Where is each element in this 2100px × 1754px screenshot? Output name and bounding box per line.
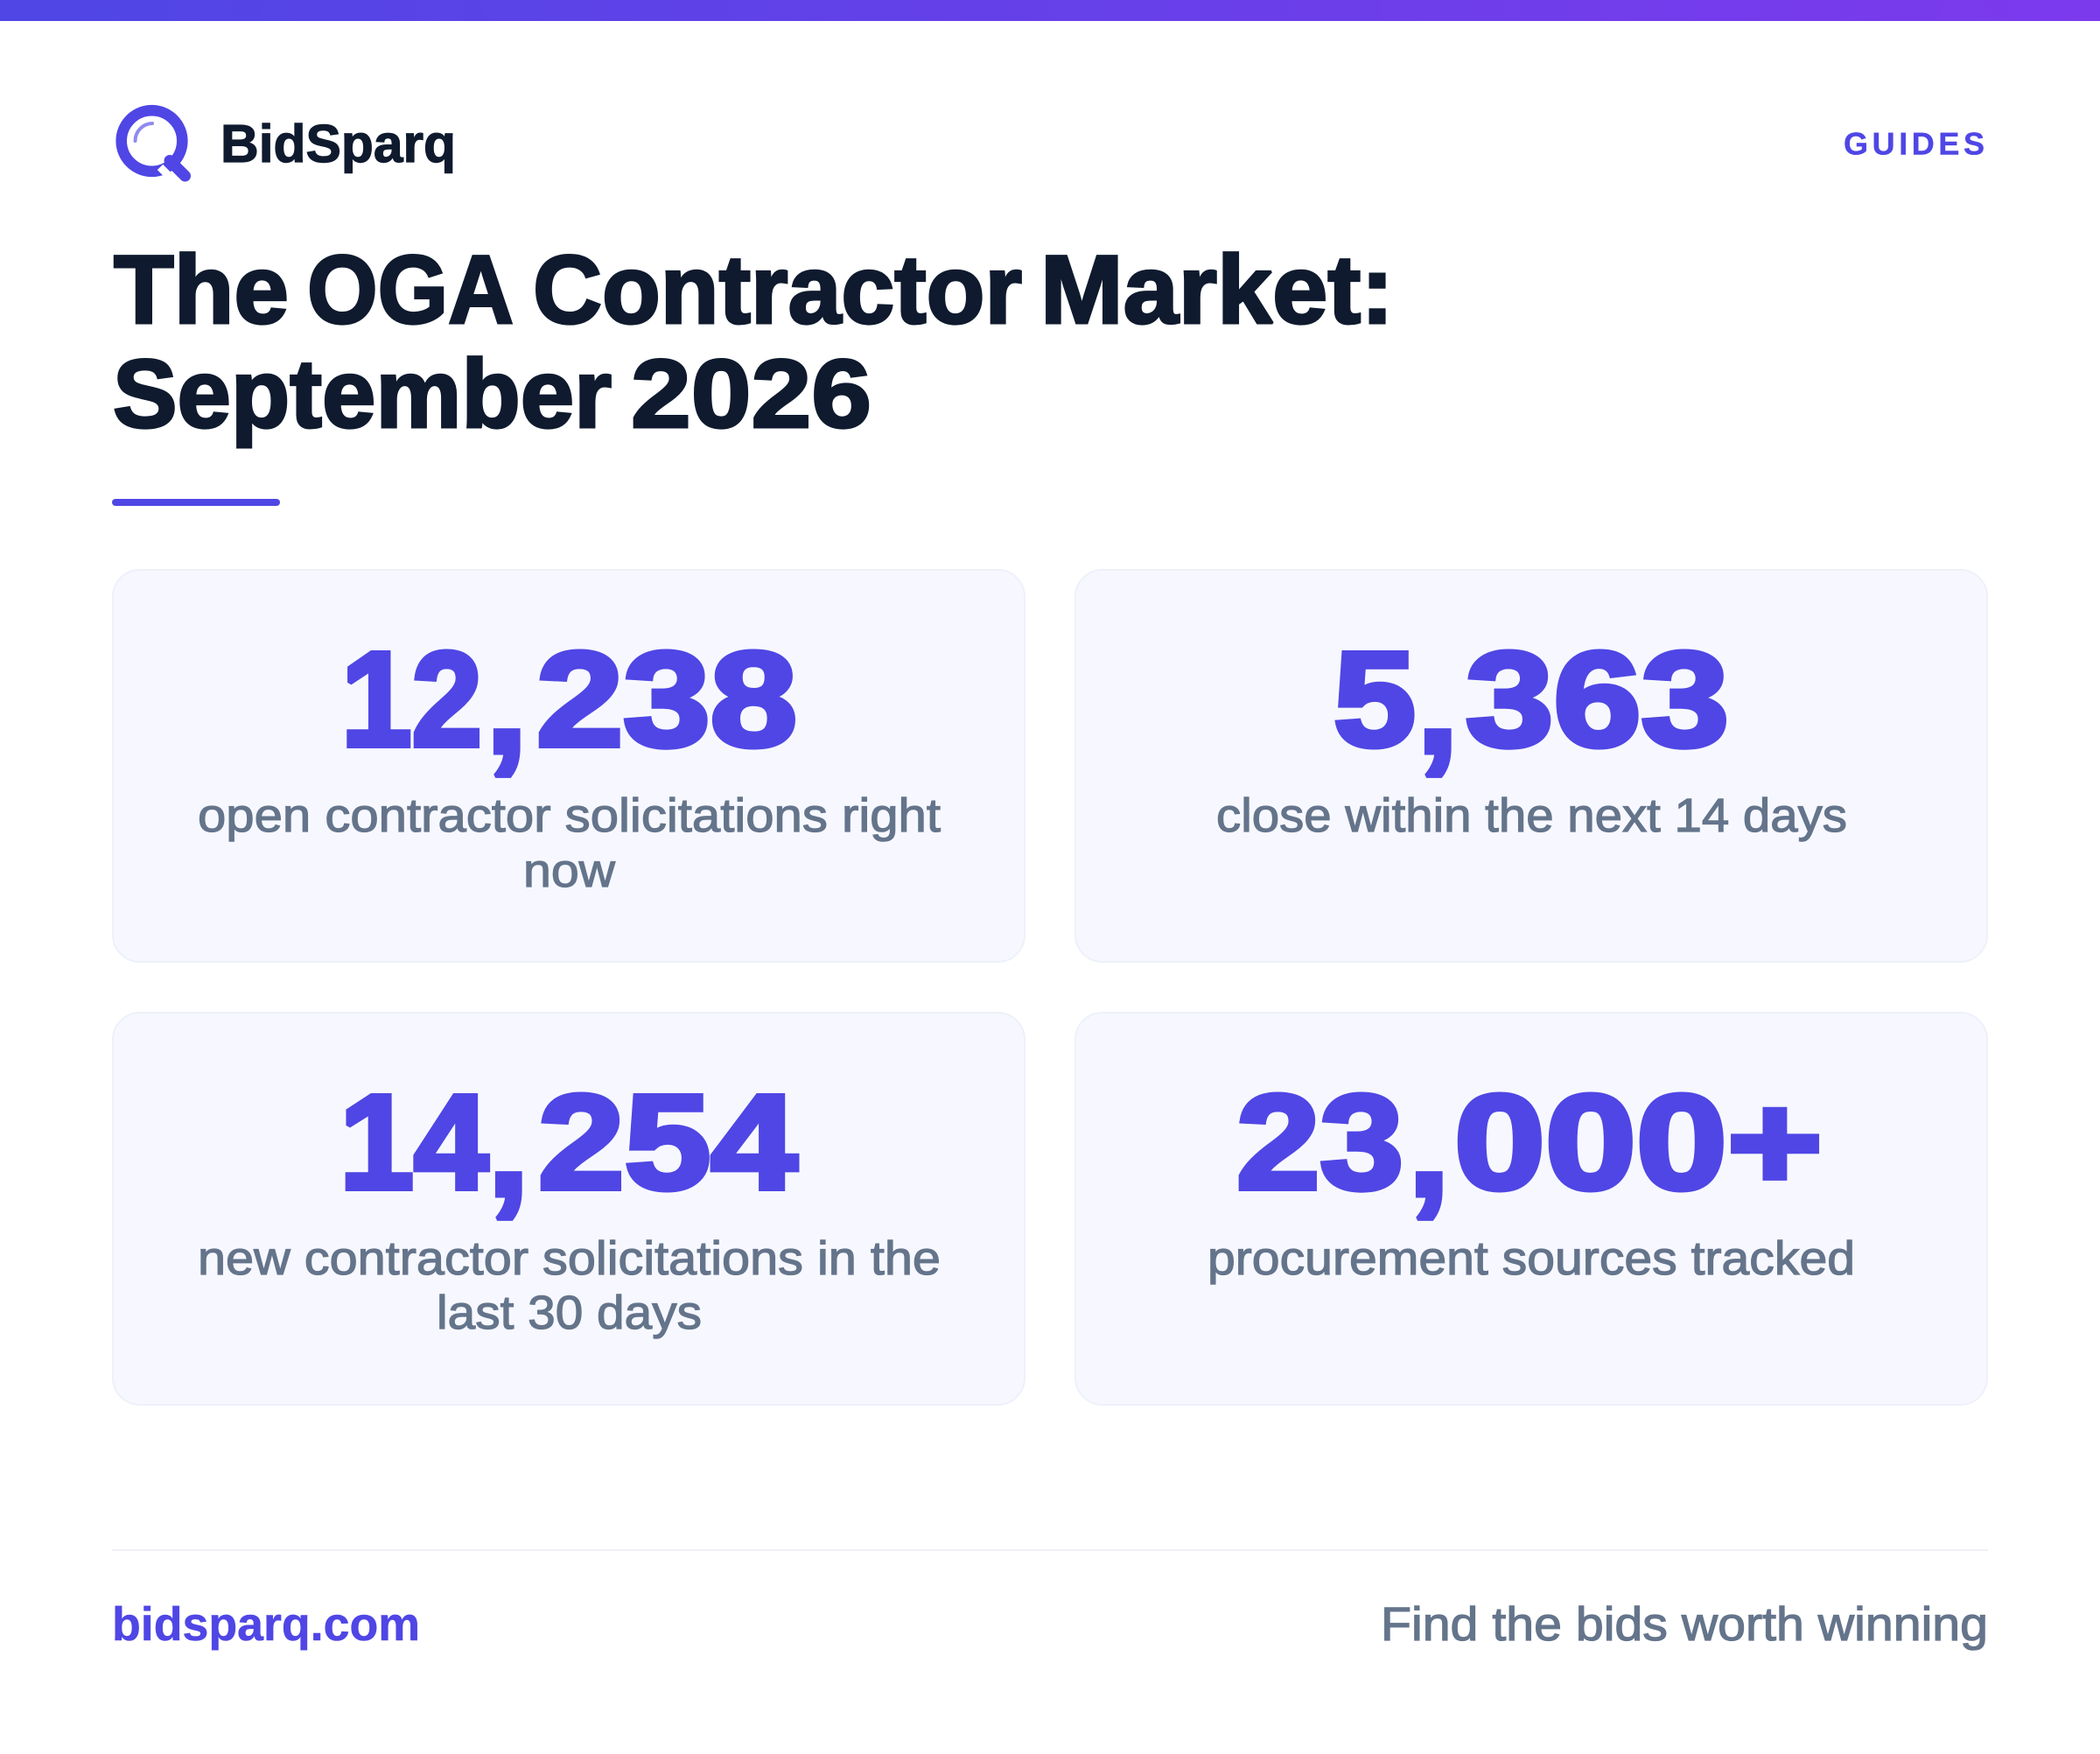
header: brand logo and wordmark [122, 110, 456, 177]
panel: open solicitations [113, 570, 1025, 962]
brand name: BidSparq [220, 114, 456, 173]
stat number: 000+ [1454, 1067, 1823, 1217]
stat description: procurement sources tracked [1208, 1232, 1855, 1285]
stat number: 238 [536, 624, 797, 775]
panel: new solicitations [113, 1013, 1025, 1405]
title: Market: [1040, 235, 1394, 344]
stat number: 363 [1466, 624, 1729, 775]
stat description [198, 1232, 941, 1339]
icon: magnifying glass Q logo [122, 110, 186, 177]
stat description: new contractor solicitations in the [198, 1232, 941, 1285]
title: OGA [307, 235, 514, 344]
stat number: , [485, 619, 528, 785]
title: The [114, 235, 289, 344]
stat description: now [523, 845, 616, 897]
stat number: 23 [1236, 1067, 1404, 1217]
footer: tagline: Find the bids worth winning [1381, 1598, 1988, 1651]
stat number [1334, 619, 1729, 785]
stat number: 14 [340, 1067, 488, 1217]
stat description: last 30 days [437, 1287, 702, 1339]
title: 2026 [631, 340, 872, 448]
category label: GUIDES [1844, 126, 1984, 161]
stat number: , [1416, 619, 1460, 785]
footer: website: bidsparq.com [112, 1598, 420, 1651]
stat number [341, 619, 797, 785]
stat description [198, 789, 941, 897]
accent underline [112, 499, 280, 506]
stat number: , [486, 1062, 530, 1228]
top gradient bar [0, 0, 2100, 21]
stat number: , [1407, 1062, 1451, 1228]
footer divider [112, 1549, 1988, 1551]
title: September [113, 340, 612, 448]
title: Contractor [533, 235, 1022, 344]
stat number: 254 [538, 1067, 797, 1217]
stat number [340, 1062, 797, 1228]
stat number: 12 [341, 624, 482, 775]
panel: closing soon [1075, 570, 1987, 962]
stat description: close within the next 14 days [1216, 789, 1847, 842]
stat description: open contractor solicitations right [198, 789, 941, 842]
title [113, 235, 1394, 448]
stat number [1236, 1062, 1823, 1228]
panel: procurement sources [1075, 1013, 1987, 1405]
stat number: 5 [1334, 624, 1416, 775]
